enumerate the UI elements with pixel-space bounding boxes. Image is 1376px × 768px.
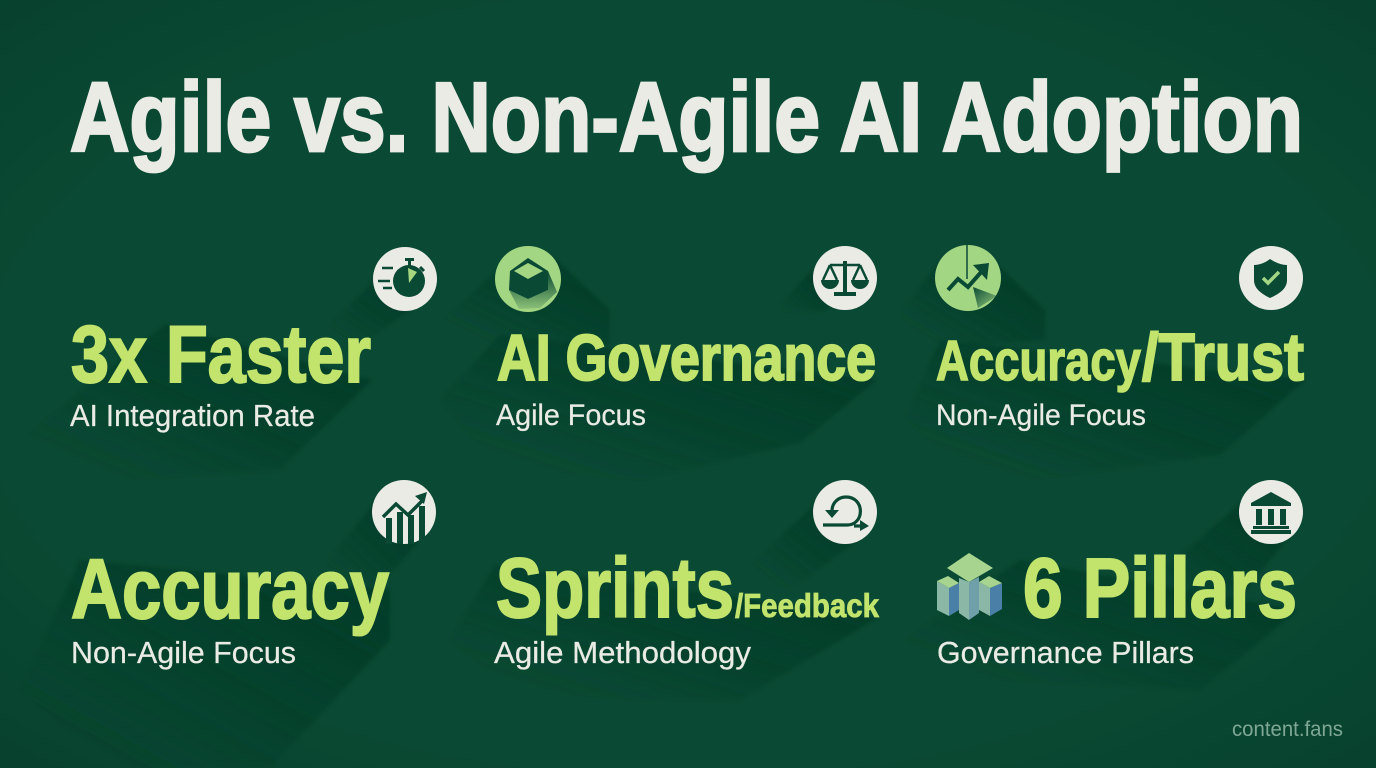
panel: Accuracy: [71, 480, 436, 670]
icon: isometric pillars: [937, 553, 1002, 620]
label: Non-Agile Focus: Non-Agile Focus: [936, 399, 1146, 432]
panel: 3x Faster: [70, 247, 437, 433]
label: Agile Methodology: Agile Methodology: [494, 635, 751, 670]
stat: AI Governance: AI Governance: [497, 321, 876, 394]
stat: Accuracy/Trust: Accuracy: [936, 329, 1141, 393]
panel: AI Governance: [495, 246, 876, 432]
panel: Sprints/Feedback: [494, 480, 880, 670]
stat: Sprints/Feedback: /Feedback: [735, 587, 880, 624]
label: Agile Focus: Agile Focus: [496, 399, 646, 432]
panel: 6 Pillars: [937, 480, 1303, 670]
icon: growth chart: [372, 480, 436, 544]
stat: Accuracy: Accuracy: [71, 542, 389, 636]
icon: scales: [813, 246, 877, 310]
icon: stopwatch: [373, 247, 437, 311]
watermark: content.fans: [1232, 718, 1343, 741]
label: Non-Agile Focus: Non-Agile Focus: [71, 635, 296, 670]
stat: Accuracy/Trust: /Trust: [1142, 320, 1304, 395]
panel: Accuracy/Trust: [813, 245, 1304, 432]
stat: 3x Faster: 3x Faster: [71, 310, 371, 400]
stat: Sprints/Feedback: Sprints: [496, 541, 734, 635]
icon: sprint loop: [813, 480, 877, 544]
label: Governance Pillars: Governance Pillars: [937, 635, 1194, 670]
icon: trend chart: [935, 245, 1001, 311]
icon: cube: [495, 246, 561, 312]
stat: 6 Pillars: 6 Pillars: [1023, 541, 1297, 635]
label: AI Integration Rate: AI Integration Rate: [70, 398, 315, 433]
icon: shield: [1239, 246, 1303, 310]
icon: pillared building: [1239, 480, 1303, 544]
